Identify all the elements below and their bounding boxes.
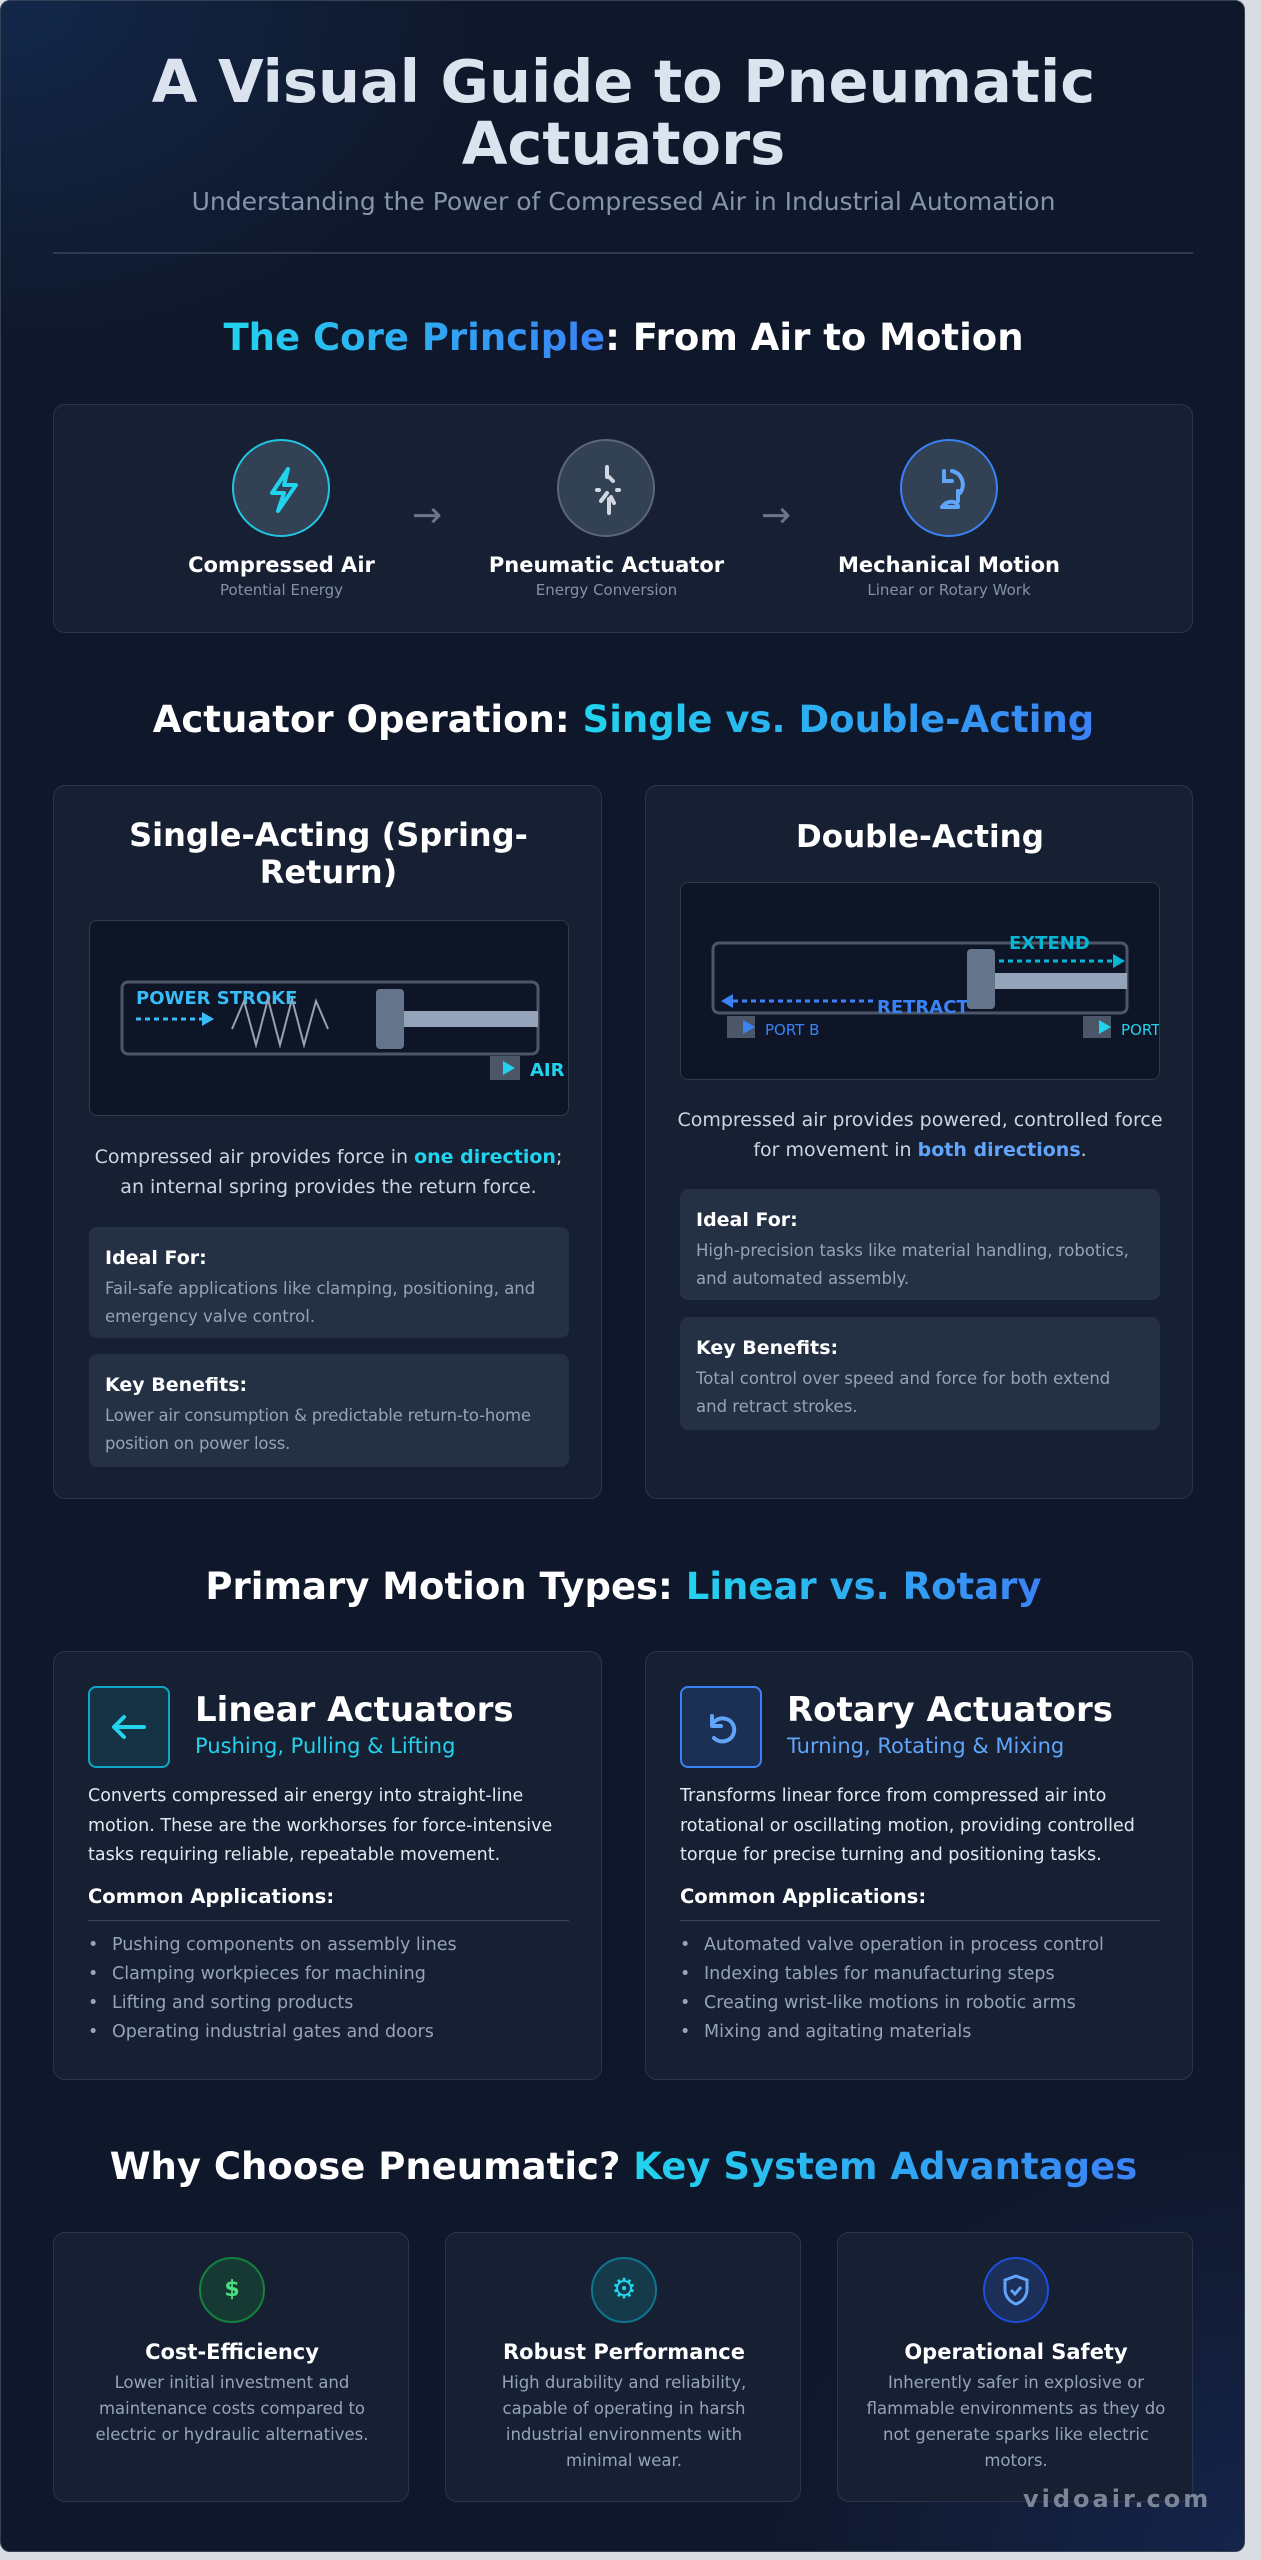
label: compressed air [188, 553, 375, 599]
icon: linear arrow [88, 1686, 170, 1768]
icon: gear: ⚙ [611, 2272, 637, 2305]
icon: shield [983, 2257, 1049, 2323]
panel: double-acting [645, 785, 1193, 1499]
watermark: vidoair.com [1023, 2485, 1211, 2513]
description: Transforms linear force from compressed air into rotational or oscillating motion, providing controlled torque for precise turning and positioning tasks. [680, 1786, 1135, 1865]
text: Operational Safety [904, 2340, 1128, 2364]
label: motion [838, 553, 1060, 599]
icon: dollar: $ [224, 2277, 240, 2302]
card title [129, 816, 528, 891]
list: Mixing and agitating materials [704, 2022, 971, 2042]
label: actuator: Energy Conversion [536, 581, 677, 599]
subtitle: Understanding the Power of Compressed Air in Industrial Automation [192, 187, 1055, 216]
applications heading [88, 1885, 569, 1921]
panel: safety [837, 2232, 1193, 2502]
label: compressed air: Compressed Air [188, 553, 375, 577]
box: key benefits [89, 1354, 569, 1467]
list [90, 1935, 457, 2042]
panel: single-acting [53, 785, 602, 1499]
diagram: single acting: AIR [530, 1060, 565, 1081]
heading: core principle: The Core Principle: From Air to Motion [223, 316, 1024, 359]
card title: Return) [260, 853, 397, 891]
panel: robust [445, 2232, 801, 2502]
list: Indexing tables for manufacturing steps [704, 1964, 1055, 1984]
diagram: double acting: RETRACT [877, 997, 969, 1018]
heading: operation: Actuator Operation: Single vs. Double-Acting [153, 698, 1094, 741]
box: ideal for [89, 1227, 569, 1338]
text: High durability and reliability, capable of operating in harsh industrial environments with minimal wear. [502, 2373, 746, 2470]
list: Creating wrist-like motions in robotic arms [704, 1993, 1076, 2013]
panel: core principle flow [53, 404, 1193, 633]
arrow: → [412, 495, 442, 536]
list: Operating industrial gates and doors [112, 2022, 434, 2042]
description: Compressed air provides force in one direction; an internal spring provides the return force. [95, 1146, 562, 1198]
list: Pushing components on assembly lines [112, 1935, 457, 1955]
list: Lifting and sorting products [112, 1993, 353, 2013]
heading: advantages: Why Choose Pneumatic? Key System Advantages [110, 2145, 1137, 2188]
box: ideal for: High-precision tasks like material handling, robotics, and automated assembly. [696, 1241, 1129, 1288]
diagram: double acting: PORT B [765, 1021, 819, 1039]
panel: linear [53, 1651, 602, 2080]
title [152, 47, 1095, 178]
title: A Visual Guide to Pneumatic [152, 47, 1095, 116]
text [96, 2340, 368, 2444]
box: key benefits [680, 1317, 1160, 1430]
label: motion: Mechanical Motion [838, 553, 1060, 577]
box: ideal for: Fail-safe applications like clamping, positioning, and emergency valve control. [105, 1279, 535, 1326]
box: ideal for: Ideal For: [696, 1209, 798, 1231]
text: Robust Performance [503, 2340, 745, 2364]
label: actuator: Pneumatic Actuator [489, 553, 724, 577]
text: Cost-Efficiency [145, 2340, 319, 2364]
diagram: single acting [89, 920, 569, 1116]
box: key benefits: Key Benefits: [696, 1337, 838, 1359]
diagram: double acting: EXTEND [1009, 933, 1090, 954]
box: key benefits: Total control over speed and force for both extend and retract strokes. [696, 1369, 1110, 1416]
box: key benefits: Lower air consumption & predictable return-to-home position on power loss. [105, 1406, 531, 1453]
card heading: Turning, Rotating & Mixing [787, 1734, 1064, 1758]
arrow: → [761, 495, 791, 536]
icon: motion [900, 439, 998, 537]
card heading: Rotary Actuators [787, 1690, 1113, 1730]
card heading: Pushing, Pulling & Lifting [195, 1734, 455, 1758]
applications heading [680, 1885, 1160, 1921]
card heading [786, 1690, 1113, 1758]
panel: cost [53, 2232, 409, 2502]
icon: dollar [199, 2257, 265, 2323]
list: Clamping workpieces for machining [112, 1964, 426, 1984]
applications heading: Common Applications: [680, 1885, 926, 1908]
text: Inherently safer in explosive or flammable environments as they do not generate sparks like electric motors. [867, 2373, 1165, 2470]
applications heading: Common Applications: [88, 1885, 334, 1908]
box: ideal for: Ideal For: [105, 1247, 207, 1269]
card title: Single-Acting (Spring- [129, 816, 528, 854]
icon: compressed air [232, 439, 330, 537]
list: Automated valve operation in process control [704, 1935, 1104, 1955]
icon: gear [591, 2257, 657, 2323]
label: compressed air: Potential Energy [220, 581, 343, 599]
box: ideal for [680, 1189, 1160, 1300]
label: actuator [489, 553, 724, 599]
icon: rotary [680, 1686, 762, 1768]
list [682, 1935, 1104, 2042]
card title: Double-Acting [796, 819, 1044, 855]
title: Actuators [462, 109, 785, 178]
description: Converts compressed air energy into straight-line motion. These are the workhorses for force-intensive tasks requiring reliable, repeatable movement. [88, 1786, 552, 1865]
heading: motion types: Primary Motion Types: Linear vs. Rotary [205, 1565, 1042, 1608]
panel: rotary [645, 1651, 1193, 2080]
label: motion: Linear or Rotary Work [867, 581, 1031, 599]
diagram: double acting [680, 882, 1160, 1080]
icon: actuator [557, 439, 655, 537]
description: Compressed air provides powered, controlled force for movement in both directions. [677, 1109, 1163, 1161]
card heading [195, 1690, 514, 1758]
diagram: single acting: POWER STROKE [136, 988, 297, 1009]
text: Lower initial investment and maintenance costs compared to electric or hydraulic alternatives. [96, 2373, 368, 2444]
box: key benefits: Key Benefits: [105, 1374, 247, 1396]
card heading: Linear Actuators [195, 1690, 514, 1730]
